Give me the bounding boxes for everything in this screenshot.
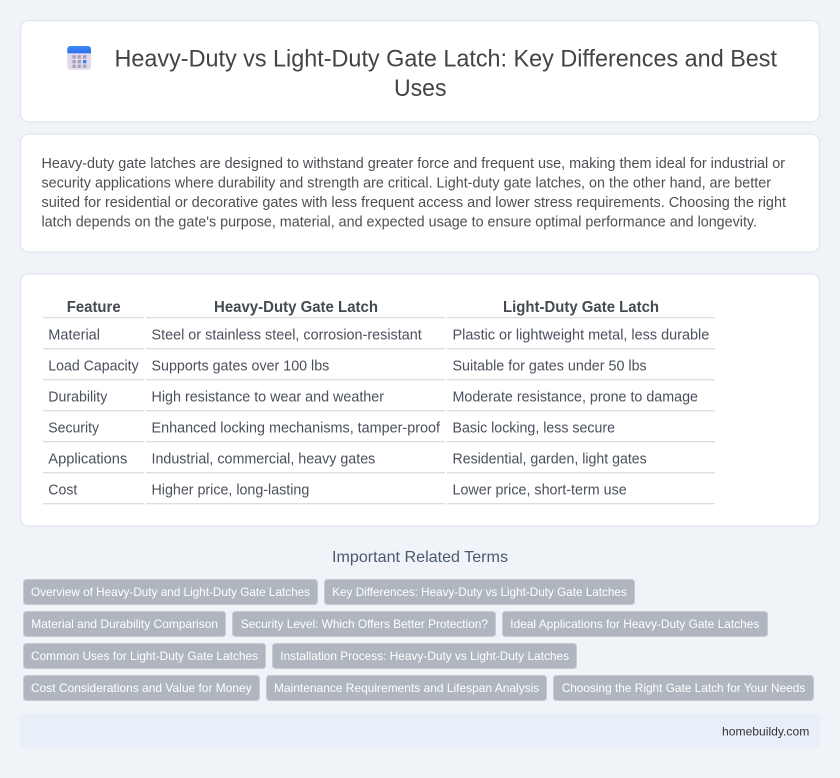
tag [232, 612, 496, 636]
tag [266, 676, 546, 700]
table header row [43, 299, 715, 318]
row: cost [43, 482, 715, 504]
title: Uses [394, 75, 446, 102]
tag: Ideal Applications for Heavy-Duty Gate Latches [510, 617, 759, 631]
row: load capacity: Suitable for gates under 50 lbs [452, 358, 647, 374]
row: security: Security [48, 420, 100, 436]
title [114, 46, 777, 102]
tag [554, 676, 814, 700]
table header row: Light-Duty Gate Latch [503, 299, 659, 316]
row: applications: Industrial, commercial, heavy gates [152, 451, 375, 467]
tag [24, 580, 318, 604]
tag: Security Level: Which Offers Better Protection? [241, 617, 488, 631]
row: material: Material [48, 327, 100, 343]
tag: Overview of Heavy-Duty and Light-Duty Gate Latches [31, 585, 310, 599]
tag: Cost Considerations and Value for Money [31, 681, 252, 695]
row: durability: High resistance to wear and weather [152, 389, 384, 405]
tag: Maintenance Requirements and Lifespan Analysis [274, 681, 539, 695]
row: load capacity: Supports gates over 100 lbs [152, 358, 329, 374]
row: material: Plastic or lightweight metal, less durable [452, 327, 709, 343]
row: durability [43, 389, 715, 411]
table header row: Feature [67, 299, 121, 316]
panel: introduction text: Heavy-duty gate latches are designed to withstand greater force and frequent use, making them ideal for industrial or [42, 156, 785, 172]
panel: introduction text: security applications where durability and strength are critical. Light-duty gate latches, on the other hand, are better [42, 176, 771, 192]
tag [24, 612, 226, 636]
row: load capacity: Load Capacity [48, 358, 139, 374]
row: security: Basic locking, less secure [452, 420, 615, 436]
tag: Key Differences: Heavy-Duty vs Light-Duty Gate Latches [332, 585, 627, 599]
footer [20, 714, 820, 748]
panel: introduction text [20, 134, 820, 252]
related term tags [24, 580, 814, 700]
panel: header [20, 20, 820, 122]
tag [24, 676, 260, 700]
heading: important related terms: Important Related Terms [332, 549, 508, 566]
row: applications: Residential, garden, light gates [452, 451, 647, 467]
row: durability: Moderate resistance, prone to damage [452, 389, 698, 405]
panel: introduction text: latch depends on the gate's purpose, material, and expected usage to ensure optimal performance and longevity. [42, 214, 757, 230]
row: security: Enhanced locking mechanisms, tamper-proof [152, 420, 441, 436]
row: security [43, 420, 715, 442]
row: cost: Cost [48, 482, 77, 498]
row: load capacity [43, 358, 715, 380]
tag: Common Uses for Light-Duty Gate Latches [31, 649, 258, 663]
row: material: Steel or stainless steel, corrosion-resistant [152, 327, 422, 343]
icon: calendar [67, 46, 91, 70]
panel: introduction text: suited for residential or decorative gates with less frequent access and lower stress requirements. Choosing the right [42, 195, 786, 211]
title: Heavy-Duty vs Light-Duty Gate Latch: Key Differences and Best [114, 46, 777, 72]
footer: homebuildy.com [722, 724, 809, 738]
row: applications [43, 451, 715, 473]
tag: Material and Durability Comparison [31, 617, 218, 631]
tag [24, 644, 266, 668]
tag [502, 612, 768, 636]
tag [272, 644, 576, 668]
row: cost: Higher price, long-lasting [152, 482, 309, 498]
row: durability: Durability [48, 389, 108, 405]
row: cost: Lower price, short-term use [452, 482, 627, 498]
tag: Choosing the Right Gate Latch for Your Needs [562, 681, 805, 695]
panel: comparison table [20, 274, 820, 526]
table header row: Heavy-Duty Gate Latch [214, 299, 378, 316]
row: material [43, 327, 715, 349]
tag: Installation Process: Heavy-Duty vs Light-Duty Latches [280, 649, 569, 663]
row: applications: Applications [48, 451, 127, 467]
tag [324, 580, 634, 604]
